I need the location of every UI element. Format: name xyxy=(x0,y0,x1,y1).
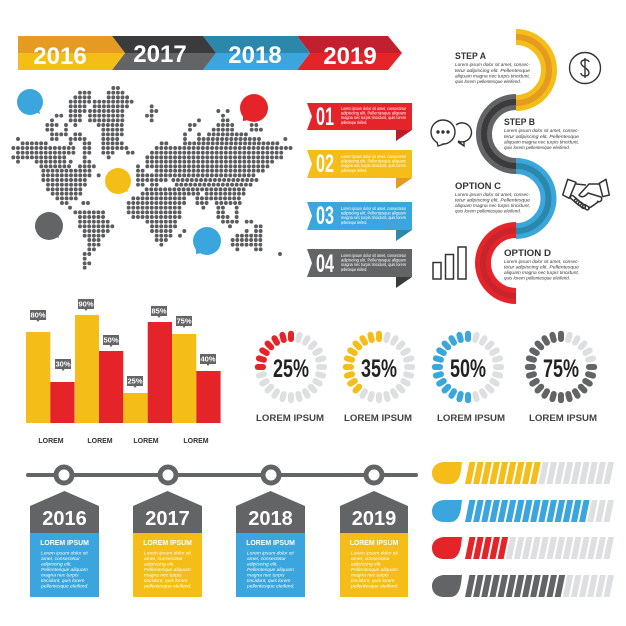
timeline card 2017: pellentesque eleifend. xyxy=(143,584,192,590)
step b text: aliquam magna nec turpis tincidunt, xyxy=(504,140,579,144)
step a text: tetur adipiscing elit. Pellentesque xyxy=(455,68,530,73)
timeline card 2018: tincidunt, quis lorem xyxy=(247,578,290,584)
timeline card 2019: tincidunt, quis lorem xyxy=(351,578,394,584)
value tag 50%: 50% xyxy=(103,336,119,345)
option c text: Lorem ipsum dolor sit amet, consec- xyxy=(455,192,530,197)
timeline card 2019: pellentesque eleifend. xyxy=(350,584,399,590)
value tag 30%: 30% xyxy=(55,360,71,369)
timeline card 2016: LOREM IPSUM xyxy=(40,540,89,547)
radial gauge 35%: 35% xyxy=(361,355,397,383)
timeline card 2018: magna nec turpis xyxy=(247,572,285,578)
ribbon 04 xyxy=(307,249,412,288)
value tag 85%: 85% xyxy=(151,307,167,316)
timeline card 2017: adipiscing elit. xyxy=(144,562,175,568)
map pin: grey south america xyxy=(35,212,63,240)
year arrow banner: 2016 xyxy=(33,43,87,70)
s-curve process ribbon xyxy=(483,37,549,296)
option d text: OPTION D xyxy=(504,248,552,258)
step a text: aliquam magna nec turpis tincidunt, xyxy=(455,74,530,78)
ribbon 01: magna nec turpis tincidunt, quis lorem xyxy=(341,115,406,120)
bar chart axis labels: LOREM xyxy=(38,438,64,445)
timeline card 2017: magna nec turpis xyxy=(144,572,182,578)
option c text: quis lorem pellentesque eleifend. xyxy=(455,208,521,214)
timeline card 2016 xyxy=(30,491,99,597)
map pin: blue northwest xyxy=(17,89,43,115)
radial gauge 25%: 25% xyxy=(273,355,309,383)
timeline card 2019: Lorem ipsum dolor sit xyxy=(351,550,398,556)
timeline line and nodes xyxy=(26,467,418,483)
timeline card 2017 xyxy=(133,491,202,597)
step b text: STEP B xyxy=(504,117,535,127)
option c text: OPTION C xyxy=(455,181,502,191)
timeline card 2017: LOREM IPSUM xyxy=(143,540,192,547)
option d text: tetur adipiscing elit. Pellentesque xyxy=(504,264,579,270)
timeline card 2019: LOREM IPSUM xyxy=(350,540,399,547)
timeline card 2016: tincidunt, quis lorem xyxy=(41,578,84,584)
step a text: STEP A xyxy=(455,51,486,61)
timeline card 2018 xyxy=(236,491,305,597)
option c text: aliquam magna nec turpis tincidunt, xyxy=(455,203,530,208)
timeline card 2017: Lorem ipsum dolor sit xyxy=(144,550,191,556)
bar chart axis labels: LOREM xyxy=(87,438,113,445)
option d text: aliquam magna nec turpis tincidunt, xyxy=(504,270,579,275)
value tag 90%: 90% xyxy=(78,300,94,309)
value tag 75%: 75% xyxy=(176,317,192,326)
radial gauge 25% xyxy=(256,334,324,424)
ribbon 02: adipiscing elit. Pellentesque aliquam xyxy=(341,158,406,164)
ribbon 01: pellentesque eleifend. xyxy=(341,120,367,125)
ribbon 02: pellentesque eleifend. xyxy=(341,168,367,173)
ribbon 03: adipiscing elit. Pellentesque aliquam xyxy=(341,210,406,216)
ribbon 03 xyxy=(307,202,412,241)
bar chart xyxy=(26,299,221,423)
step a text: quis lorem pellentesque eleifend. xyxy=(455,79,521,84)
progress bar yellow xyxy=(432,462,612,484)
timeline card 2017: amet, consectetur xyxy=(144,556,183,562)
progress bar grey xyxy=(432,575,612,597)
timeline card 2018: adipiscing elit. xyxy=(247,562,278,568)
value tag 40%: 40% xyxy=(200,355,216,364)
radial gauge 25%: LOREM IPSUM xyxy=(256,413,324,424)
year arrow banner: 2017 xyxy=(133,41,187,68)
option c text: tetur adipiscing elit. Pellentesque xyxy=(455,198,530,202)
timeline card 2017: Pellentesque aliquam xyxy=(144,567,191,573)
ribbon 01: adipiscing elit. Pellentesque aliquam xyxy=(341,110,406,116)
timeline card 2018: pellentesque eleifend. xyxy=(246,584,295,590)
bar chart axis labels xyxy=(38,438,209,445)
timeline card 2018: amet, consectetur xyxy=(247,556,286,562)
ribbon 02: Lorem ipsum dolor sit amet, consectetur xyxy=(341,154,406,159)
option d text: Lorem ipsum dolor sit amet, consec- xyxy=(504,259,579,264)
timeline card 2016: 2016 xyxy=(42,508,87,530)
year arrow banner: 2018 xyxy=(228,42,282,69)
icon: dollar coin xyxy=(570,52,600,84)
progress bar red xyxy=(432,537,612,559)
step a text: Lorem ipsum dolor sit amet, consec- xyxy=(455,62,530,67)
step b text: Lorem ipsum dolor sit amet, consec- xyxy=(504,128,579,133)
ribbon 03: magna nec turpis tincidunt, quis lorem xyxy=(341,215,406,220)
radial gauge 35% xyxy=(344,334,412,424)
map pin: blue indian ocean xyxy=(193,227,221,255)
map pin: red northeast xyxy=(240,94,268,122)
timeline card 2019: magna nec turpis xyxy=(351,572,389,578)
timeline card 2017: 2017 xyxy=(145,508,190,530)
radial gauge 50%: LOREM IPSUM xyxy=(437,413,505,424)
icon: handshake xyxy=(563,179,609,210)
radial gauge 50% xyxy=(435,334,505,424)
ribbon 02: magna nec turpis tincidunt, quis lorem xyxy=(341,163,406,168)
ribbon 04: magna nec turpis tincidunt, quis lorem xyxy=(341,262,406,267)
progress bar blue xyxy=(432,500,612,522)
timeline card 2016: adipiscing elit. xyxy=(41,562,72,568)
timeline card 2019: 2019 xyxy=(352,508,396,530)
year arrow banner: 2019 xyxy=(323,43,377,70)
option d text xyxy=(504,248,579,280)
ribbon 02: 02 xyxy=(316,150,334,178)
value tag 25%: 25% xyxy=(127,377,143,386)
radial gauge 35%: LOREM IPSUM xyxy=(344,413,412,424)
timeline card 2018: Lorem ipsum dolor sit xyxy=(247,550,294,556)
timeline card 2019 xyxy=(340,491,408,597)
dotted world map xyxy=(13,88,291,268)
timeline card 2019: amet, consectetur xyxy=(351,556,390,562)
bar chart axis labels: LOREM xyxy=(133,438,159,445)
ribbon 03: pellentesque eleifend. xyxy=(341,220,367,225)
timeline card 2019: adipiscing elit. xyxy=(351,562,382,568)
icon: bar chart xyxy=(433,247,466,279)
timeline card 2018: 2018 xyxy=(248,508,293,530)
step b text xyxy=(504,117,579,150)
ribbon 03: Lorem ipsum dolor sit amet, consectetur xyxy=(341,206,406,211)
icon: chat bubbles xyxy=(431,120,471,146)
bar chart axis labels: LOREM xyxy=(183,438,209,445)
step b text: quis lorem pellentesque eleifend. xyxy=(504,145,570,150)
ribbon 01 xyxy=(307,103,412,141)
timeline card 2016: pellentesque eleifend. xyxy=(40,584,89,590)
timeline card 2017: tincidunt, quis lorem xyxy=(144,578,188,584)
ribbon 04: adipiscing elit. Pellentesque aliquam xyxy=(341,258,406,262)
timeline card 2018: Pellentesque aliquam xyxy=(247,567,294,573)
step a text xyxy=(455,51,530,84)
ribbon 03: 03 xyxy=(316,202,334,230)
step b text: tetur adipiscing elit. Pellentesque xyxy=(504,134,579,139)
radial gauge 75%: 75% xyxy=(543,355,579,383)
ribbon 04: 04 xyxy=(316,250,334,278)
year arrow banner xyxy=(18,36,402,70)
value tag 80%: 80% xyxy=(30,311,46,320)
radial gauge 75%: LOREM IPSUM xyxy=(529,413,597,424)
timeline card 2018: LOREM IPSUM xyxy=(246,540,295,547)
timeline card 2016: Pellentesque aliquam xyxy=(41,567,88,573)
ribbon 04: Lorem ipsum dolor sit amet, consectetur xyxy=(341,253,406,258)
option c text xyxy=(455,181,530,214)
ribbon 04: pellentesque eleifend. xyxy=(341,267,367,272)
timeline card 2016: amet, consectetur xyxy=(41,556,80,562)
radial gauge 75% xyxy=(528,334,597,424)
ribbon 02 xyxy=(307,150,412,189)
radial gauge 50%: 50% xyxy=(450,355,486,383)
timeline card 2019: Pellentesque aliquam xyxy=(351,567,398,573)
map pin: yellow atlantic xyxy=(105,168,131,194)
ribbon 01: 01 xyxy=(316,103,334,131)
option d text: quis lorem pellentesque eleifend. xyxy=(504,276,570,280)
ribbon 01: Lorem ipsum dolor sit amet, consectetur xyxy=(341,106,406,111)
timeline card 2016: magna nec turpis xyxy=(41,572,79,578)
timeline card 2016: Lorem ipsum dolor sit xyxy=(41,550,88,556)
